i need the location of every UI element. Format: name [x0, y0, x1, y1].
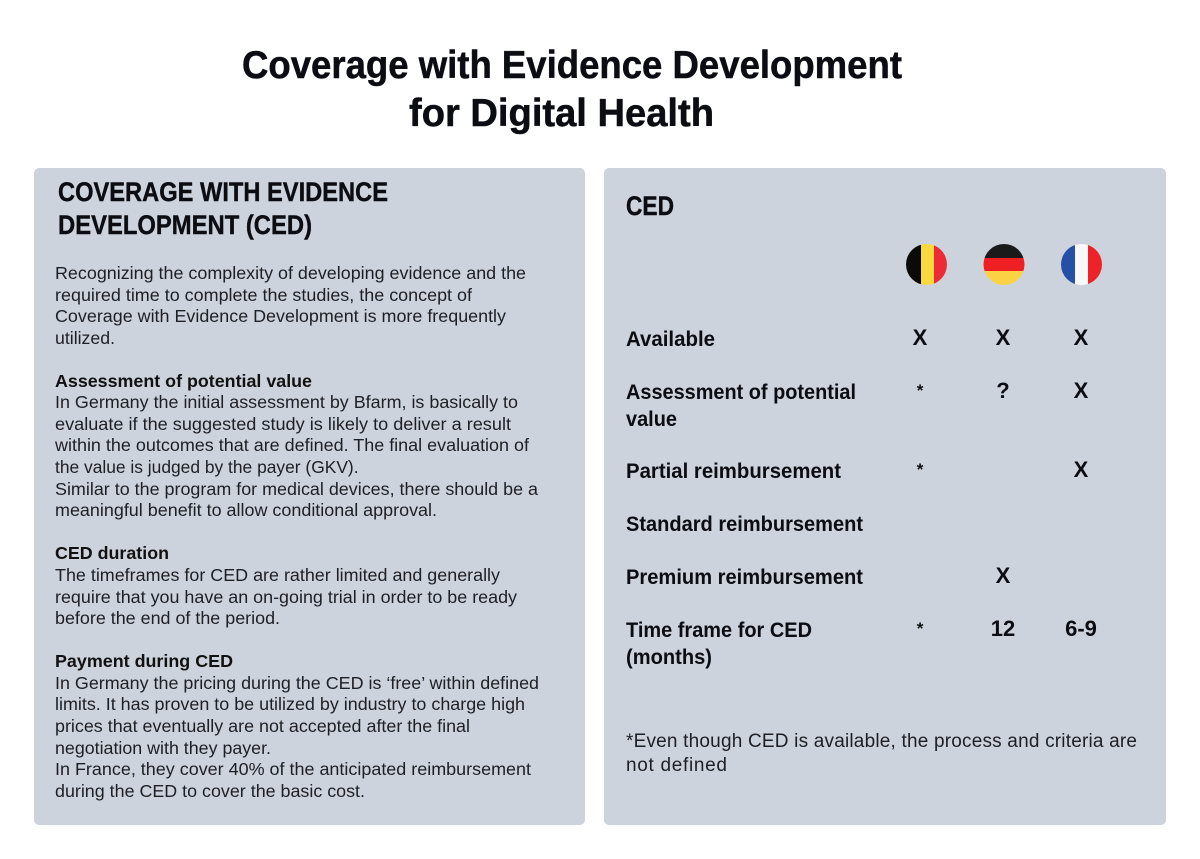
row: time frame for CED: *: [917, 619, 924, 638]
row: premium reimbursement: X: [996, 563, 1011, 588]
text block: CED duration: before the end of the period.: [55, 608, 280, 628]
row: assessment of potential value: Assessment of potential: [626, 380, 856, 404]
row: premium reimbursement: [626, 563, 1011, 589]
title: Coverage with Evidence Development: [242, 44, 902, 87]
text block: assessment of potential value: evaluate if the suggested study is likely to deliver a result: [55, 414, 511, 434]
footnote: [626, 731, 1137, 776]
text block: assessment of potential value: meaningful benefit to allow conditional approval.: [55, 500, 437, 520]
text block: assessment of potential value: Similar to the program for medical devices, there should be a: [55, 479, 538, 499]
row: partial reimbursement: X: [1074, 457, 1089, 482]
row: partial reimbursement: [626, 457, 1089, 483]
text block: introduction: utilized.: [55, 328, 115, 348]
text block: introduction: Coverage with Evidence Development is more frequently: [55, 306, 506, 326]
text block: payment during CED: [55, 651, 539, 801]
row: assessment of potential value: X: [1074, 378, 1089, 403]
row: available: X: [996, 325, 1011, 350]
text block: introduction: [55, 263, 526, 348]
text block: CED duration: require that you have an on-going trial in order to be ready: [55, 587, 517, 607]
panel heading: COVERAGE WITH EVIDENCE: [58, 177, 388, 207]
icon: Belgium flag: [906, 244, 947, 285]
row: time frame for CED: (months): [626, 645, 712, 669]
text block: payment during CED: negotiation with they payer.: [55, 738, 271, 758]
row: available: [626, 325, 1089, 351]
text block: payment during CED: during the CED to cover the basic cost.: [55, 781, 365, 801]
text block: CED duration: The timeframes for CED are rather limited and generally: [55, 565, 500, 585]
text block: introduction: Recognizing the complexity of developing evidence and the: [55, 263, 526, 283]
row: time frame for CED: Time frame for CED: [626, 618, 812, 642]
text block: CED duration: [55, 543, 517, 628]
title: for Digital Health: [409, 92, 714, 135]
panel heading: DEVELOPMENT (CED): [58, 210, 312, 240]
row: standard reimbursement: Standard reimbursement: [626, 512, 863, 536]
text block: payment during CED: In Germany the pricing during the CED is ‘free’ within defined: [55, 673, 539, 693]
text block: assessment of potential value: In Germany the initial assessment by Bfarm, is basically to: [55, 392, 518, 412]
icon: Germany flag: [983, 244, 1025, 285]
row: assessment of potential value: [626, 378, 1089, 431]
text block: assessment of potential value: the value is judged by the payer (GKV).: [55, 457, 359, 477]
row: available: X: [913, 325, 928, 350]
title: [242, 44, 902, 135]
row: assessment of potential value: ?: [996, 378, 1010, 403]
panel: coverage with evidence development text: [34, 168, 585, 825]
row: assessment of potential value: value: [626, 407, 677, 431]
row: time frame for CED: 12: [991, 616, 1015, 641]
row: premium reimbursement: Premium reimbursement: [626, 565, 863, 589]
row: available: Available: [626, 327, 715, 351]
text block: assessment of potential value: within the outcomes that are defined. The final evaluation of: [54, 435, 529, 455]
text block: assessment of potential value: Assessment of potential value: [55, 371, 312, 391]
panel heading: CED: [626, 191, 674, 221]
icon: France flag: [1061, 244, 1102, 285]
footnote: *Even though CED is available, the process and criteria are: [626, 731, 1137, 752]
text block: CED duration: CED duration: [55, 543, 169, 563]
row: time frame for CED: [626, 616, 1097, 669]
text block: assessment of potential value: [54, 371, 538, 520]
text block: payment during CED: Payment during CED: [55, 651, 233, 671]
row: time frame for CED: 6-9: [1065, 616, 1097, 641]
row: partial reimbursement: Partial reimbursement: [626, 459, 841, 483]
row: assessment of potential value: *: [917, 381, 924, 400]
panel heading: [58, 177, 388, 240]
row: available: X: [1074, 325, 1089, 350]
footnote: not defined: [626, 755, 727, 776]
text block: payment during CED: In France, they cover 40% of the anticipated reimbursement: [55, 759, 531, 779]
text block: payment during CED: prices that eventually are not accepted after the final: [55, 716, 470, 736]
text block: payment during CED: limits. It has proven to be utilized by industry to charge high: [55, 694, 525, 714]
text block: introduction: required time to complete the studies, the concept of: [55, 285, 472, 305]
row: partial reimbursement: *: [917, 460, 924, 479]
panel: CED comparison table: [604, 168, 1166, 825]
